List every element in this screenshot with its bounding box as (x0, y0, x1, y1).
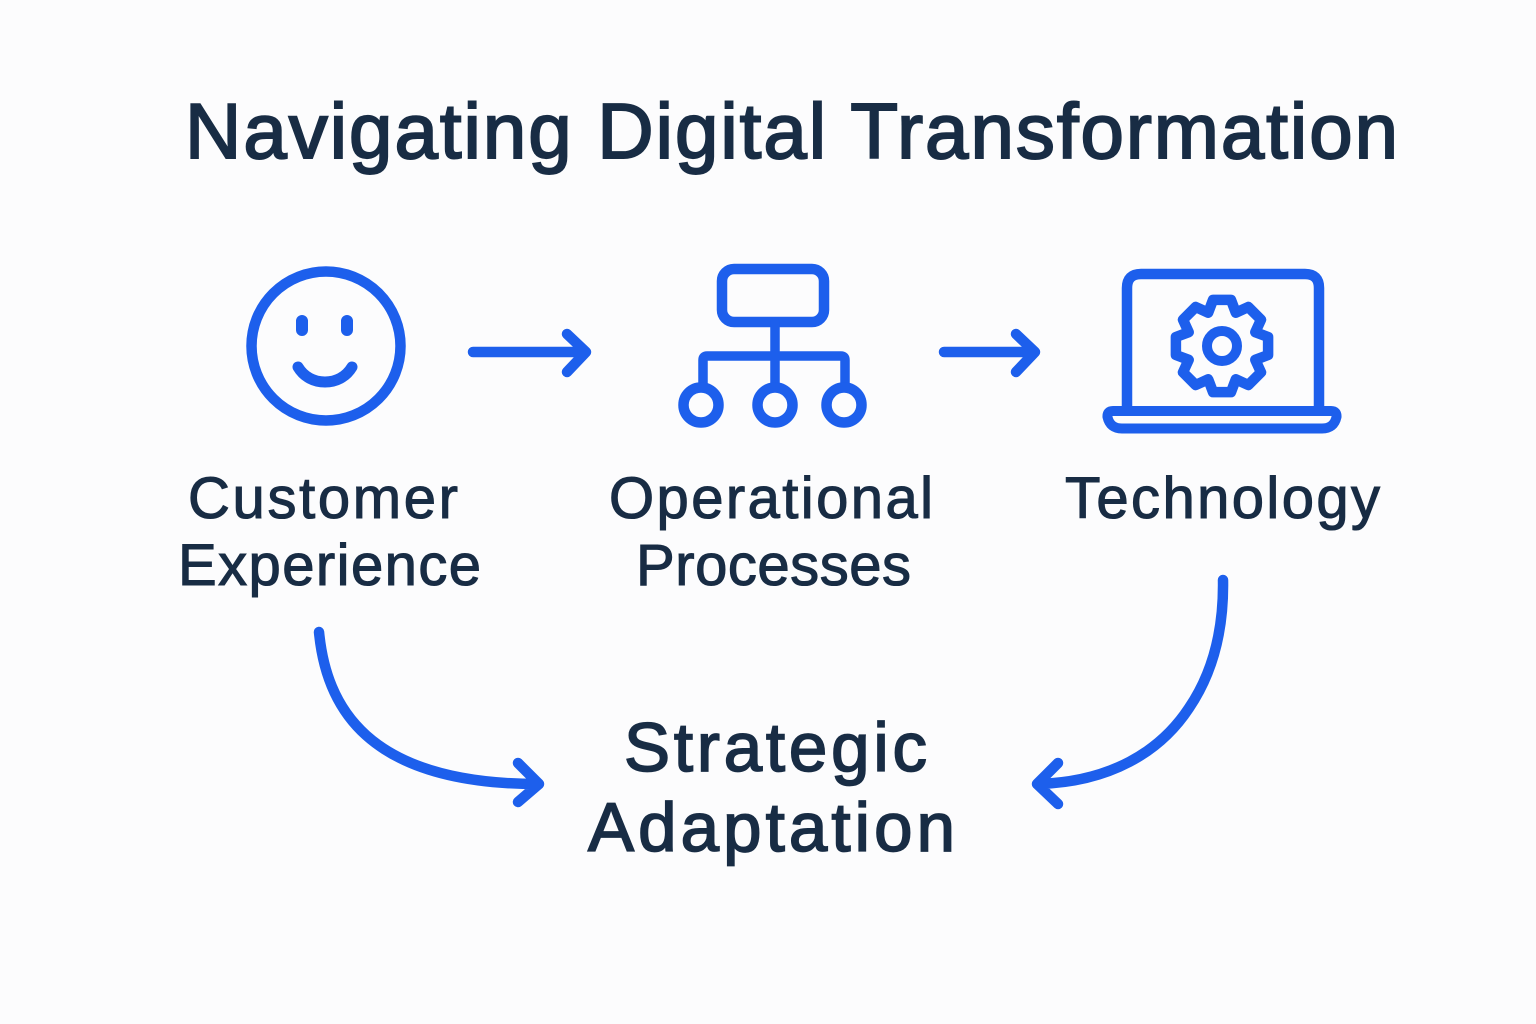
label: customer experience: Customer (188, 466, 458, 531)
label: strategic adaptation: Strategic (624, 709, 927, 786)
title: Navigating Digital Transformation (185, 87, 1398, 175)
label: strategic adaptation: Adaptation (588, 789, 955, 866)
label: operational processes: Processes (636, 533, 911, 598)
icon: hierarchy (684, 269, 862, 422)
icon: laptop with gear (1107, 274, 1337, 428)
label: customer experience (178, 466, 481, 598)
label: strategic adaptation (588, 709, 955, 866)
arrow: operational processes to technology (944, 334, 1035, 372)
label: operational processes (609, 466, 933, 598)
arrow: customer experience to strategic adaptation (319, 632, 539, 802)
arrow: technology to strategic adaptation (1037, 580, 1223, 804)
label: technology: Technology (1065, 466, 1380, 531)
label: operational processes: Operational (609, 466, 933, 531)
arrow: customer experience to operational processes (473, 334, 586, 372)
icon: smiley face (252, 272, 400, 420)
label: customer experience: Experience (178, 533, 481, 598)
